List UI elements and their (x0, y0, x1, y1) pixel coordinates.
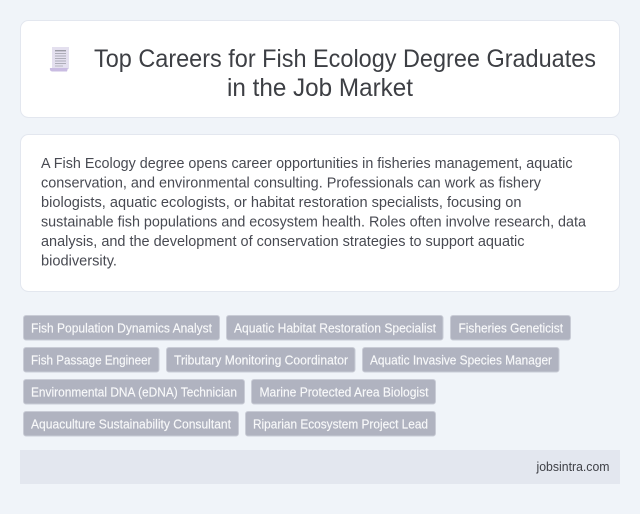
text block: description: conservation, and environmental consulting. Professionals can work as fishery (41, 174, 541, 192)
text block: description: A Fish Ecology degree opens career opportunities in fisheries management, aquatic (41, 155, 573, 172)
icon: document scroll (50, 47, 69, 72)
tag (450, 316, 570, 340)
tag list (24, 316, 570, 436)
text block: description: sustainable fish populations and ecosystem health. Roles often involve research, data (41, 214, 587, 230)
panel: description (20, 134, 620, 292)
tag (24, 380, 244, 404)
tag (252, 380, 436, 404)
tag (246, 412, 436, 436)
tag: Tributary Monitoring Coordinator (174, 352, 349, 368)
tag (24, 348, 159, 372)
tag: Aquatic Habitat Restoration Specialist (234, 320, 436, 336)
text block: description: biodiversity. (41, 252, 117, 270)
tag: Aquaculture Sustainability Consultant (31, 416, 231, 432)
tag: Fish Passage Engineer (31, 352, 152, 368)
tag (24, 316, 220, 340)
footer source text: jobsintra.com (536, 459, 610, 474)
tag (24, 412, 238, 436)
tag: Aquatic Invasive Species Manager (370, 352, 553, 368)
tag: Fish Population Dynamics Analyst (31, 320, 212, 336)
title: Top Careers for Fish Ecology Degree Graduates (94, 45, 596, 73)
tag (166, 348, 355, 372)
tag: Riparian Ecosystem Project Lead (253, 416, 428, 432)
text block: description: biologists, aquatic ecologists, or habitat restoration specialists, focusing on (41, 194, 522, 211)
tag (226, 316, 443, 340)
panel: header (20, 20, 620, 118)
title: in the Job Market (227, 74, 413, 102)
tag: Environmental DNA (eDNA) Technician (31, 384, 237, 400)
tag: Fisheries Geneticist (458, 320, 563, 336)
tag (362, 348, 559, 372)
text block: description: analysis, and the development of conservation strategies to support aquatic (41, 233, 525, 250)
footer bar (20, 450, 620, 484)
tag: Marine Protected Area Biologist (260, 384, 429, 400)
